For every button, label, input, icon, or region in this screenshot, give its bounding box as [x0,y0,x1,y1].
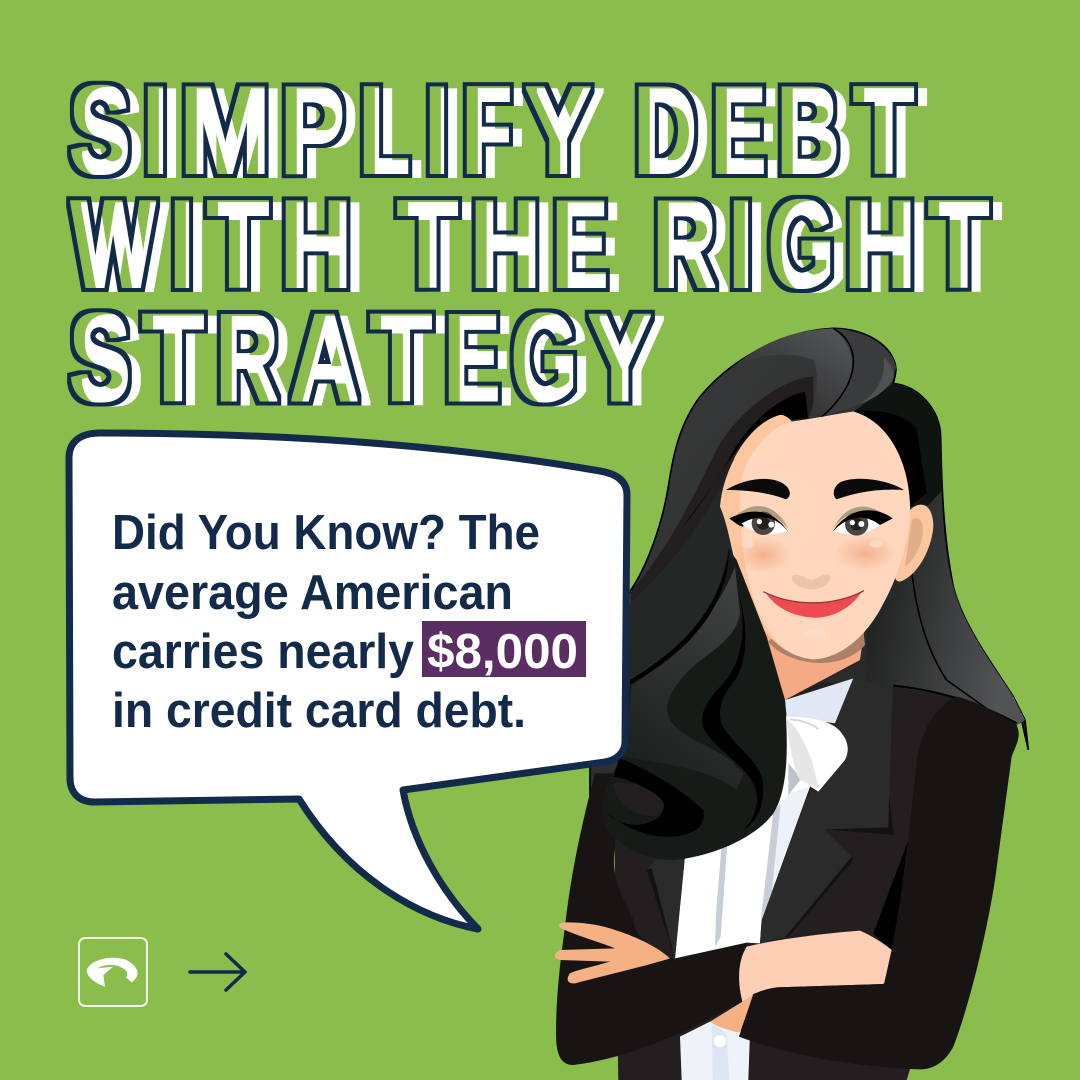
right lapel [760,678,893,943]
title: I [731,176,751,314]
title: E [445,290,499,428]
title: T [398,176,457,314]
title: A [291,290,358,428]
title: D [635,62,696,200]
nose [792,575,831,589]
title: G [769,176,833,314]
jacket body [555,678,1019,1080]
fingers [555,922,670,983]
callout text: Did You Know? The [112,506,540,560]
neck, ear and face [720,412,933,700]
title: T [371,290,431,428]
title: I [144,62,166,200]
highlight: $8,000: $8,000 [427,625,578,679]
title: T [143,290,203,428]
tie bow [788,763,802,795]
blush [735,537,792,573]
title: E [553,176,607,314]
title: T [208,176,268,314]
shirt lower [680,1022,750,1080]
title: E [712,62,765,200]
title: F [464,62,511,200]
title: L [360,62,409,200]
face [720,412,910,659]
ear [895,505,933,582]
title: I [172,176,192,314]
arrow [190,954,245,990]
title: T [854,62,913,200]
title: Y [589,290,651,428]
callout text [112,506,586,738]
left lapel [647,857,685,958]
title: S [70,290,129,428]
callout text: average American [112,566,513,620]
shirt centre [675,713,810,958]
title [70,62,988,428]
title: P [282,62,344,200]
black gap [873,840,908,952]
speech bubble [69,433,627,929]
title: R [217,290,277,428]
black swirl strand [702,593,763,830]
lobe base [603,548,787,860]
neck [763,613,867,700]
title: M [180,62,270,200]
grey strand [623,567,743,790]
forearm skin [739,931,892,1003]
right sleeve [739,697,1019,1069]
title: Y [526,62,589,200]
left sleeve [556,773,747,1065]
title: G [512,290,576,428]
mouth [766,592,862,618]
eyebrows [726,479,790,499]
collar [785,678,853,723]
lower curl [603,758,704,837]
front hair lobe [603,547,787,860]
title: W [72,176,154,314]
callout text: in credit card debt. [112,684,526,738]
logo icon [79,938,147,1006]
thin black strand [630,547,729,685]
shoulder hair line [893,686,1017,723]
title: H [281,176,351,314]
eyeshadow [735,506,788,528]
title: B [778,62,838,200]
title: T [929,176,988,314]
title: H [471,176,540,314]
title: S [70,62,129,200]
callout text: carries nearly [112,625,414,679]
hair back [590,328,1028,820]
title: R [654,176,715,314]
character: businesswoman [555,328,1028,1080]
title: I [427,62,447,200]
eyes [742,516,788,534]
title: H [845,176,915,314]
hair wisp near left temple [733,415,792,460]
